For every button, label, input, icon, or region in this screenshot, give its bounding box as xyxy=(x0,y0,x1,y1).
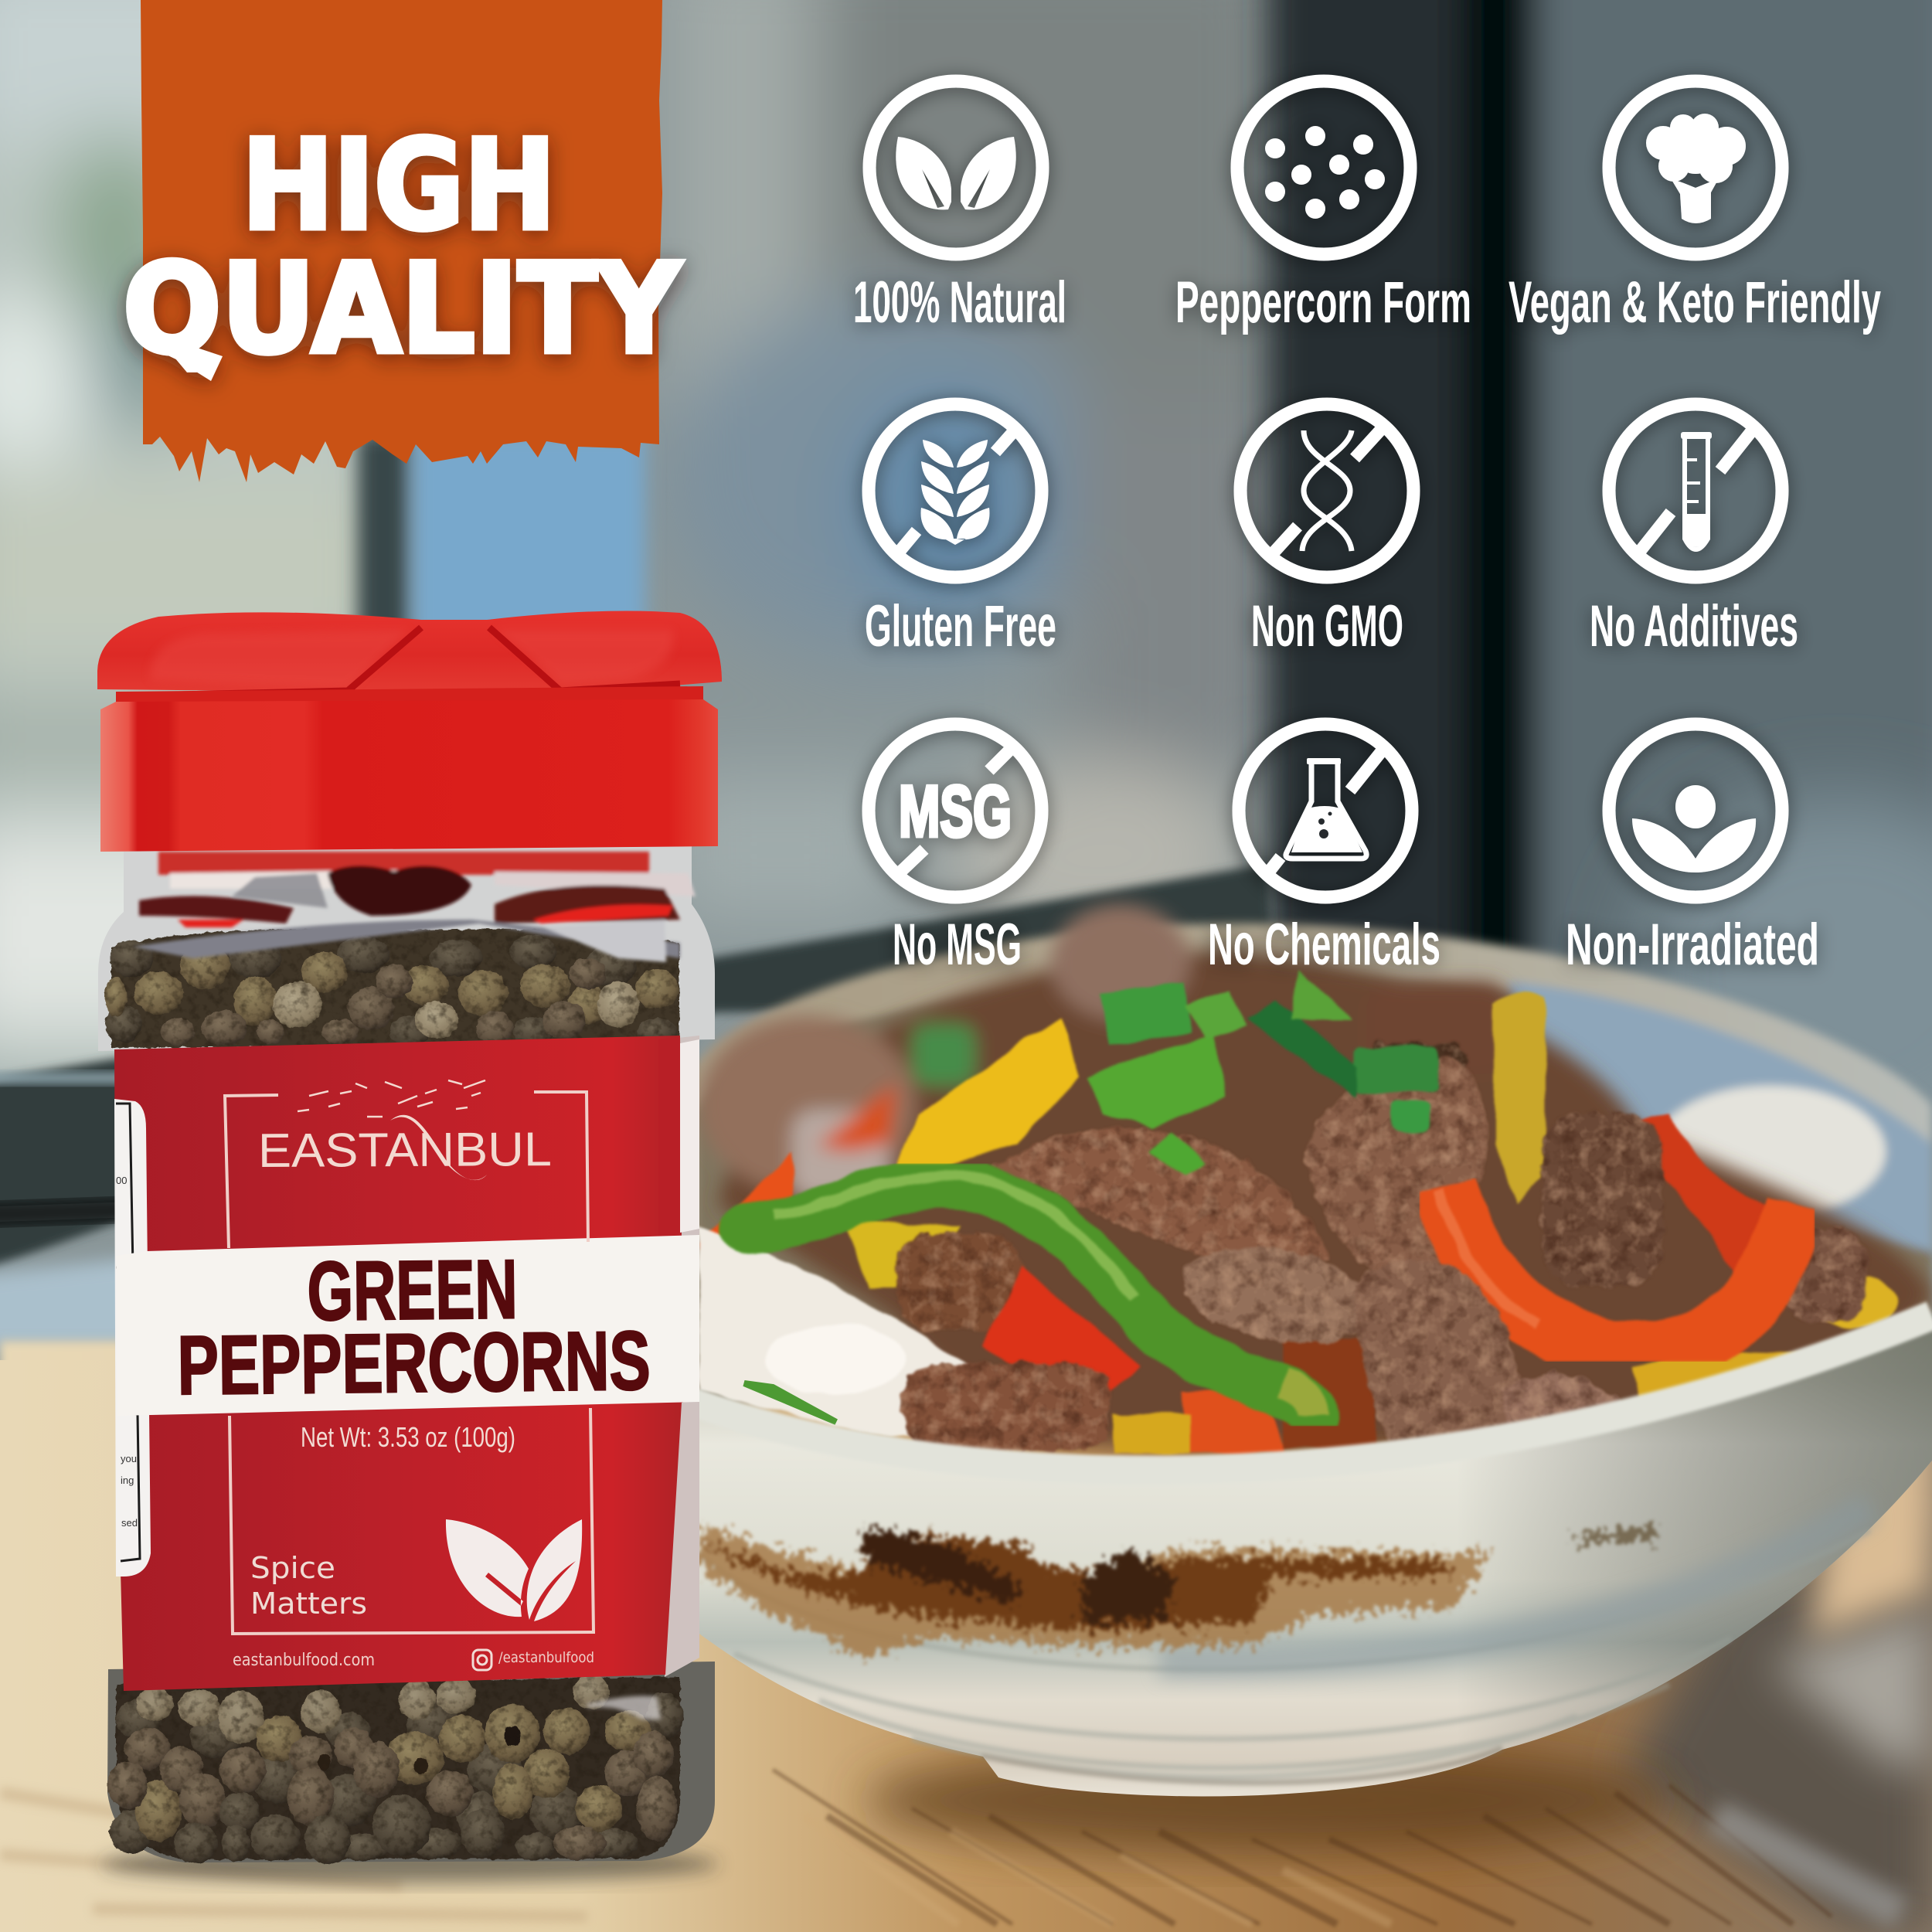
orange pepper strip xyxy=(1437,1186,1797,1353)
product name: GREEN xyxy=(307,1242,518,1338)
food base and blurred back pieces xyxy=(699,904,1932,1447)
benefit icons xyxy=(869,81,1782,897)
website: eastanbulfood.com xyxy=(233,1651,375,1670)
wooden table xyxy=(0,1341,1932,1932)
instagram handle: /eastanbulfood xyxy=(498,1649,594,1666)
label right side xyxy=(665,1036,699,1677)
icon: no chemicals xyxy=(1239,724,1412,897)
blue glaze streak xyxy=(1159,1507,1870,1662)
nutrition panel: ars. xyxy=(117,1378,135,1389)
slogan xyxy=(250,1551,367,1621)
label frame xyxy=(225,1092,594,1634)
orange banner xyxy=(141,0,662,482)
icon: no additives xyxy=(1609,404,1782,577)
nutrition panel: 00 xyxy=(116,1175,127,1186)
bowl with stir-fry xyxy=(680,904,1932,1796)
back vegetables xyxy=(699,991,1897,1403)
label red xyxy=(114,1036,699,1691)
brand logo xyxy=(258,1080,552,1180)
nutrition panel: ing xyxy=(121,1475,134,1486)
icon: no msg xyxy=(869,724,1042,897)
icon: non gmo xyxy=(1240,404,1413,577)
label leaf icon xyxy=(446,1519,582,1621)
heading: high quality xyxy=(123,113,682,381)
front meat xyxy=(903,1247,1658,1450)
jar shadow xyxy=(100,1845,719,1883)
back meat xyxy=(896,1043,1866,1330)
jar bottom glass xyxy=(107,1662,715,1862)
benefit labels: No MSG xyxy=(893,912,1022,978)
icon: 100% natural xyxy=(869,81,1043,254)
net weight: Net Wt: 3.53 oz (100g) xyxy=(301,1421,515,1453)
slogan: Spice xyxy=(250,1551,335,1585)
bowl interior xyxy=(680,923,1932,1406)
icon: non-irradiated xyxy=(1609,724,1782,897)
jar xyxy=(97,611,722,1883)
bowl rings xyxy=(699,1530,1870,1783)
jar cap band xyxy=(100,699,718,852)
jar neck reflections xyxy=(133,852,696,962)
product name xyxy=(177,1242,651,1412)
instagram icon xyxy=(473,1650,492,1670)
bowl rim xyxy=(680,1315,1932,1471)
nutrition panel: you xyxy=(121,1453,137,1464)
brand logo: EASTANBUL xyxy=(258,1123,552,1178)
label xyxy=(114,1036,699,1691)
jar lid xyxy=(97,611,722,699)
bowl exterior xyxy=(680,1314,1932,1796)
jar shoulder glass xyxy=(98,846,715,1051)
icon: gluten free xyxy=(869,404,1042,577)
heading: high quality: HIGH xyxy=(242,113,556,257)
rice and front vegetables xyxy=(699,1226,1376,1454)
benefit labels xyxy=(853,270,1881,978)
upper peppercorns xyxy=(105,929,679,1048)
icon: vegan and keto broccoli xyxy=(1609,81,1782,254)
nutrition panel xyxy=(114,1099,151,1577)
benefit labels: Gluten Free xyxy=(865,594,1056,659)
bowl side shading xyxy=(680,1314,1932,1796)
wood grain xyxy=(773,1770,1832,1924)
rust glaze xyxy=(699,1522,1654,1658)
lid shading and hinge lines xyxy=(116,628,703,709)
heading: high quality: QUALITY xyxy=(123,236,682,381)
bottom peppercorns xyxy=(107,1675,683,1864)
icon: no msg: MSG xyxy=(899,770,1012,852)
benefit labels: Non GMO xyxy=(1251,594,1403,659)
product name: PEPPERCORNS xyxy=(177,1314,651,1412)
white name band xyxy=(116,1235,699,1416)
green onions xyxy=(1087,968,1438,1177)
background: blurred window and wall xyxy=(0,0,1932,1391)
icon: peppercorn form xyxy=(1237,81,1410,254)
right strip xyxy=(658,1037,680,1236)
benefit labels: Peppercorn Form xyxy=(1175,270,1471,335)
nutrition panel: sed xyxy=(121,1517,138,1529)
benefit labels: 100% Natural xyxy=(853,270,1066,335)
slogan: Matters xyxy=(250,1587,367,1621)
long green pepper xyxy=(746,1175,1314,1414)
benefit labels: No Chemicals xyxy=(1208,912,1440,978)
onion leaf on rice xyxy=(744,1383,836,1422)
